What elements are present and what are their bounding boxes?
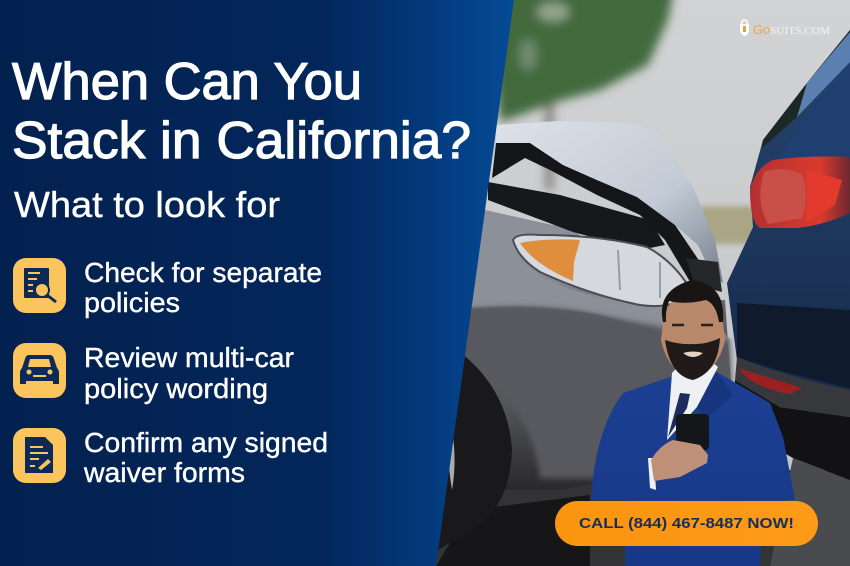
beard bbox=[665, 338, 720, 380]
icon: document with magnifier bbox=[13, 258, 66, 313]
hand bbox=[651, 440, 708, 481]
logo: GoSuits.com: Go bbox=[753, 22, 770, 37]
wheel bbox=[438, 352, 512, 550]
text: check for separate policies: Check for separate bbox=[84, 257, 322, 288]
text: confirm signed waiver forms bbox=[83, 427, 328, 488]
icon: car bbox=[13, 343, 66, 398]
gray car body bbox=[440, 200, 735, 490]
text: confirm signed waiver forms: Confirm any signed bbox=[84, 427, 328, 458]
call to action button: CALL (844) 467-8487 NOW! bbox=[579, 516, 794, 532]
logo: GoSuits.com bbox=[740, 20, 830, 37]
text: check for separate policies: policies bbox=[84, 287, 180, 318]
shirt bbox=[667, 362, 718, 440]
text: review multi-car policy wording: Review multi-car bbox=[84, 342, 294, 373]
blue car bbox=[727, 30, 850, 400]
headlight bbox=[513, 235, 692, 306]
crumpled hood bbox=[496, 121, 723, 283]
engine bay bbox=[488, 182, 665, 250]
tie bbox=[668, 393, 690, 437]
text: check for separate policies bbox=[84, 257, 322, 318]
phone bbox=[676, 414, 709, 450]
blue panel bbox=[0, 0, 514, 566]
text: confirm signed waiver forms: waiver forms bbox=[83, 457, 245, 488]
road bbox=[420, 470, 850, 566]
subtitle: What to look for bbox=[14, 184, 280, 225]
item: review multi-car policy wording bbox=[13, 342, 294, 404]
icon: signed form bbox=[13, 428, 66, 483]
text: review multi-car policy wording bbox=[84, 342, 294, 404]
bumper bbox=[737, 303, 850, 388]
call to action button bbox=[555, 501, 818, 546]
grille bbox=[686, 258, 722, 292]
tail light bbox=[750, 156, 850, 228]
logo: GoSuits.com: SUITS.COM bbox=[770, 25, 830, 37]
person: attorney with phone bbox=[591, 280, 795, 566]
photo: car collision background bbox=[420, 0, 850, 566]
suit jacket bbox=[591, 372, 795, 566]
title: Stack in California? bbox=[12, 112, 471, 170]
cuff bbox=[648, 458, 656, 490]
item: check for separate policies bbox=[13, 257, 322, 318]
title: When Can You bbox=[12, 53, 362, 111]
title bbox=[12, 53, 471, 170]
crumpled hood underside bbox=[492, 143, 722, 290]
face bbox=[661, 294, 725, 378]
tree bbox=[490, 0, 680, 190]
lapel bbox=[697, 372, 733, 420]
item: confirm signed waiver forms bbox=[13, 427, 328, 488]
text: review multi-car policy wording: policy wording bbox=[84, 373, 268, 404]
hair bbox=[662, 280, 723, 322]
eyes bbox=[672, 324, 713, 326]
